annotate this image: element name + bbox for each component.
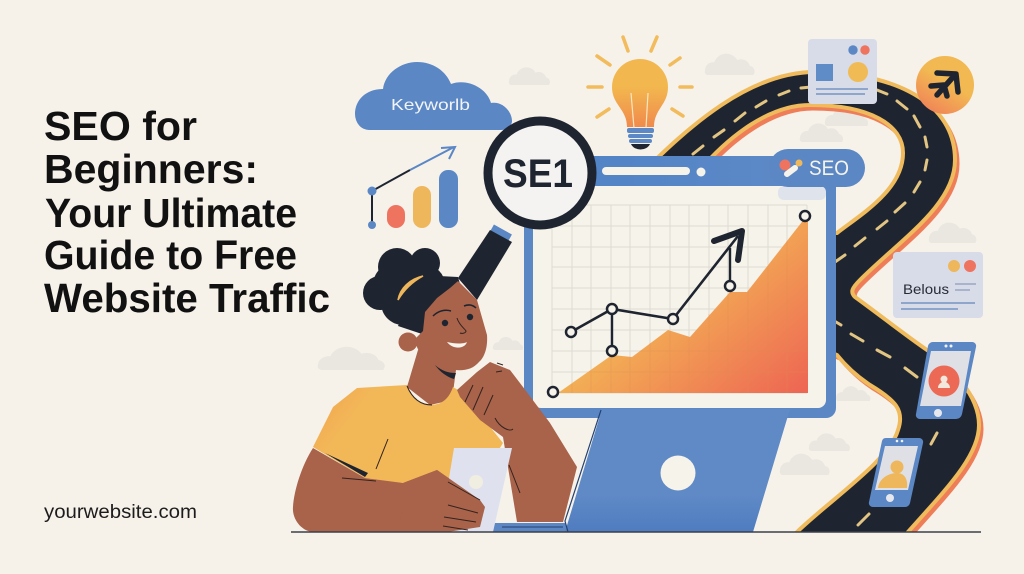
tablet [440,448,512,532]
website url: yourwebsite.com [44,502,197,523]
sleeve shadow [325,453,368,477]
monitor screen [533,186,826,408]
keyword cloud [355,62,512,130]
jaw shadow [435,365,456,379]
small bar chart icon [368,147,458,229]
nose [457,318,466,333]
hair [363,248,460,335]
browser header bar [524,156,836,186]
light bulb [588,37,692,150]
hair band [398,276,423,300]
smile [447,342,467,348]
trend line with arrow [548,211,810,397]
magnifying glass: SE1 [503,152,573,196]
person [293,248,577,532]
arrow badge [916,56,974,114]
address pill [602,167,706,176]
title: Your Ultimate [45,190,297,236]
title: Beginners: [44,146,258,192]
neck [407,350,456,405]
title: Website Traffic [44,275,330,321]
arm creases [342,439,388,481]
laptop [493,409,790,532]
holding hand [400,470,485,532]
fingers [443,482,480,530]
infographic canvas [44,35,984,533]
t-shirt [313,385,503,483]
background clouds [318,54,976,475]
ear [398,332,418,352]
belous card [893,252,983,318]
monitor frame [524,156,836,418]
face [414,281,487,370]
title [44,103,330,321]
phone: red profile [916,342,976,419]
hand knuckle lines [465,363,520,493]
SEO pill badge [769,149,865,187]
area grid overlay [572,241,807,393]
eyes and brows [433,305,476,326]
keyword cloud: Keyworlb [391,97,470,114]
title: Guide to Free [44,232,297,278]
winding road [640,72,982,549]
left arm [293,448,480,532]
neckline [407,386,432,405]
monitor with growth chart [524,156,836,418]
ground line [291,531,981,533]
right arm [457,362,577,522]
magnifying glass [458,121,592,300]
belous card: Belous [903,281,949,297]
phone: gold profile [869,438,923,507]
pill shadow [778,186,826,200]
area chart [558,218,808,393]
chart grid [552,205,807,393]
top website card [808,39,877,104]
title: SEO for [44,103,197,149]
SEO pill badge: SEO [809,157,849,180]
